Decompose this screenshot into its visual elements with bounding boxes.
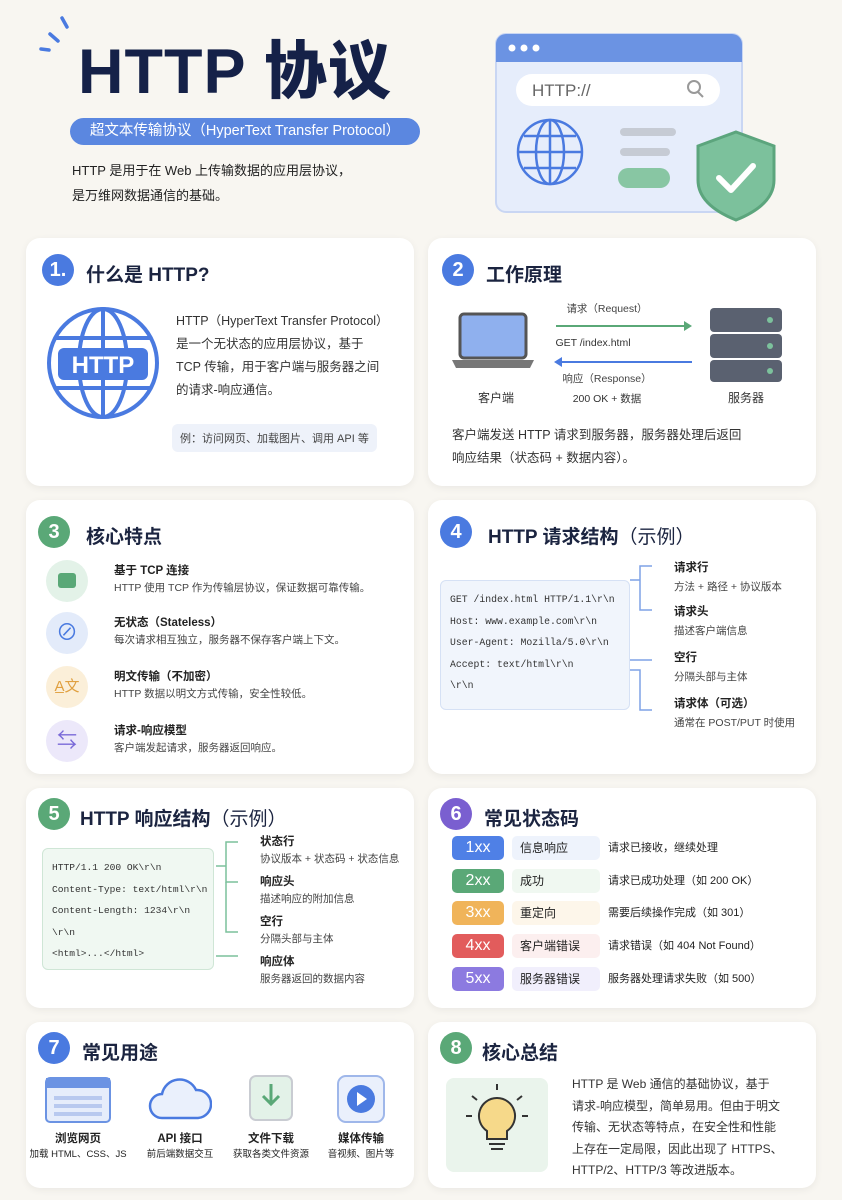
feature: plaintext: 明文传输（不加密）: [114, 671, 218, 683]
feature: plaintext: HTTP 数据以明文方式传输，安全性较低。: [114, 688, 312, 700]
badge 2: 2: [452, 259, 464, 281]
description 1: TCP 传输，用于客户端与服务器之间: [176, 360, 379, 374]
feature: TCP: 基于 TCP 连接: [114, 565, 189, 577]
status rows: 2xx: [466, 872, 490, 889]
description 1: 的请求-响应通信。: [176, 383, 280, 397]
panel 6: status codes: [428, 788, 816, 1008]
panel 5: response structure: 空行: [260, 916, 283, 928]
heading 5: HTTP 响应结构（示例）: [80, 809, 287, 830]
badge 3: [38, 516, 70, 548]
panel 4: request structure: 请求体（可选）: [674, 698, 754, 710]
panel 4: request structure: 分隔头部与主体: [674, 671, 748, 683]
use icons: 媒体传输: [338, 1133, 384, 1145]
status rows: 需要后续操作完成（如 301）: [608, 907, 750, 919]
badge 6: [440, 798, 472, 830]
use icons: 音视频、图片等: [328, 1149, 394, 1160]
intro text: 是万维网数据通信的基础。: [72, 188, 228, 203]
status rows: [452, 836, 761, 991]
example chip: [172, 424, 377, 452]
badge 6: 6: [450, 803, 462, 825]
description 2: [452, 428, 741, 465]
heading 6: 常见状态码: [484, 809, 579, 830]
title: HTTP 协议: [78, 37, 392, 107]
code: request: Accept: text/html\r\n: [450, 658, 573, 670]
subtitle pill: [70, 118, 420, 145]
diagram: client-server: 200 OK + 数据: [573, 392, 642, 405]
feature: req-resp: ⇆: [57, 730, 77, 752]
badge 1: [42, 254, 74, 286]
badge 5: 5: [48, 803, 60, 825]
status rows: 3xx: [466, 904, 490, 921]
feature: stateless: [46, 612, 345, 654]
feature: stateless: ⊘: [56, 620, 78, 645]
intro text: HTTP 是用于在 Web 上传输数据的应用层协议，: [72, 163, 351, 178]
status rows: 重定向: [520, 906, 556, 920]
diagram: client-server: GET /index.html: [555, 337, 631, 349]
status rows: 服务器错误: [520, 972, 580, 986]
labels: response parts: 协议版本 + 状态码 + 状态信息: [260, 853, 399, 865]
status rows: 请求已接收，继续处理: [608, 842, 718, 854]
code: request: \r\n: [450, 680, 474, 691]
panel 5: response structure: 服务器返回的数据内容: [260, 973, 365, 985]
code: request: Host: www.example.com\r\n: [450, 616, 597, 626]
badge 5: [38, 798, 70, 830]
panel 1: what is HTTP: [26, 238, 414, 486]
badge 3: 3: [48, 521, 60, 543]
labels: response parts: 状态行: [260, 836, 294, 848]
use icons: 前后端数据交互: [147, 1149, 213, 1160]
panel 4: request structure: 请求头: [674, 606, 708, 618]
feature: plaintext: [46, 666, 312, 708]
badge 2: [442, 254, 474, 286]
panel 8: summary: [428, 1022, 816, 1188]
use icons: 浏览网页: [55, 1133, 101, 1145]
feature: stateless: 每次请求相互独立，服务器不保存客户端上下文。: [114, 634, 345, 646]
bracket lines: [630, 565, 652, 711]
feature: TCP: [46, 560, 370, 602]
badge 7: 7: [48, 1037, 60, 1059]
globe HTTP icon: HTTP: [72, 352, 134, 379]
diagram: client-server: 服务器: [728, 390, 764, 405]
subtitle pill: 超文本传输协议（HyperText Transfer Protocol）: [90, 123, 400, 139]
heading 3: 核心特点: [86, 527, 162, 548]
code: request: User-Agent: Mozilla/5.0\r\n: [450, 637, 609, 648]
panel 5: response structure: 响应体: [260, 956, 294, 968]
panel 5: response structure: 分隔头部与主体: [260, 933, 334, 945]
badge 4: 4: [450, 521, 462, 543]
code: response: <html>...</html>: [52, 948, 144, 959]
heading 8: 核心总结: [482, 1043, 558, 1064]
summary text: 请求-响应模型，简单易用。但由于明文: [572, 1098, 780, 1112]
panel 5: response structure: 描述响应的附加信息: [260, 893, 354, 905]
feature: plaintext: A̲文: [54, 678, 80, 695]
feature: req-resp: [46, 720, 282, 762]
badge 7: [38, 1032, 70, 1064]
description 1: [176, 314, 389, 397]
description 1: 是一个无状态的应用层协议，基于: [176, 337, 364, 351]
use icons: 加载 HTML、CSS、JS: [29, 1149, 127, 1160]
summary text: HTTP 是 Web 通信的基础协议，基于: [572, 1077, 770, 1091]
badge 8: 8: [450, 1037, 462, 1059]
status rows: 服务器处理请求失败（如 500）: [608, 973, 761, 985]
heading 1: 什么是 HTTP?: [86, 265, 210, 286]
feature: req-resp: 请求-响应模型: [114, 725, 187, 737]
panel 4: request structure: 空行: [674, 652, 697, 664]
intro text: [72, 163, 351, 203]
panel 3: core features: [26, 500, 414, 774]
panel 2: working principle: [428, 238, 816, 486]
summary text: 传输、无状态等特点，在安全性和性能: [572, 1120, 776, 1134]
summary text: [572, 1077, 783, 1177]
description 2: 客户端发送 HTTP 请求到服务器，服务器处理后返回: [452, 428, 741, 442]
use icons: 获取各类文件资源: [233, 1149, 309, 1160]
status rows: 成功: [520, 874, 544, 888]
hero illustration: browser: [495, 33, 776, 222]
panel 4: request structure: [428, 500, 816, 774]
status rows: 请求错误（如 404 Not Found）: [608, 940, 761, 952]
status rows: 信息响应: [520, 841, 568, 855]
decor: sparks: [39, 16, 69, 52]
diagram: client-server: 请求（Request）: [566, 302, 648, 315]
badge 8: [440, 1032, 472, 1064]
feature: req-resp: 客户端发起请求，服务器返回响应。: [114, 742, 282, 754]
feature: TCP: HTTP 使用 TCP 作为传输层协议，保证数据可靠传输。: [114, 582, 370, 594]
use icons: API 接口: [157, 1133, 203, 1145]
code: response: HTTP/1.1 200 OK\r\n: [52, 862, 161, 873]
status rows: 1xx: [466, 839, 490, 856]
description 2: 响应结果（状态码 + 数据内容）。: [452, 451, 635, 465]
hero illustration: browser: HTTP://: [532, 81, 591, 100]
summary text: HTTP/2、HTTP/3 等改进版本。: [572, 1163, 742, 1177]
labels: request parts: [674, 561, 782, 593]
code: request: [440, 580, 630, 710]
code: response: Content-Type: text/html\r\n: [52, 884, 207, 894]
diagram: client-server: 响应（Response）: [562, 372, 652, 385]
summary text: 上存在一定局限，因此出现了 HTTPS、: [572, 1142, 783, 1156]
status rows: 客户端错误: [520, 939, 580, 953]
feature: stateless: 无状态（Stateless）: [114, 617, 222, 629]
panel 4: request structure: 通常在 POST/PUT 时使用: [674, 717, 795, 729]
description 1: HTTP（HyperText Transfer Protocol）: [176, 314, 389, 328]
diagram: client-server: [452, 302, 782, 405]
icon: light bulb: [446, 1078, 548, 1172]
status rows: 请求已成功处理（如 200 OK）: [608, 875, 758, 887]
heading 7: 常见用途: [82, 1043, 158, 1064]
globe HTTP icon: [47, 307, 159, 419]
status rows: 4xx: [466, 937, 490, 954]
use icons: 文件下载: [248, 1133, 294, 1145]
badge 1: 1.: [50, 259, 66, 281]
diagram: client-server: 客户端: [478, 390, 514, 405]
badge 4: [440, 516, 472, 548]
panel 7: common uses: [26, 1022, 414, 1188]
code: response: \r\n: [52, 926, 75, 938]
labels: response parts: [260, 835, 399, 865]
panel 4: request structure: 描述客户端信息: [674, 625, 748, 637]
code: response: Content-Length: 1234\r\n: [52, 905, 190, 916]
labels: request parts: 方法 + 路径 + 协议版本: [674, 581, 782, 593]
use icons: [29, 1075, 394, 1160]
heading 2: 工作原理: [486, 265, 562, 286]
heading 4: HTTP 请求结构（示例）: [488, 527, 695, 548]
panel 5: response structure: 响应头: [260, 876, 294, 888]
status rows: 5xx: [466, 970, 490, 987]
code: response: [42, 848, 214, 970]
example chip: 例：访问网页、加载图片、调用 API 等: [180, 433, 369, 445]
panel 5: response structure: [26, 788, 414, 1008]
code: request: GET /index.html HTTP/1.1\r\n: [450, 594, 615, 605]
labels: request parts: 请求行: [674, 562, 708, 574]
